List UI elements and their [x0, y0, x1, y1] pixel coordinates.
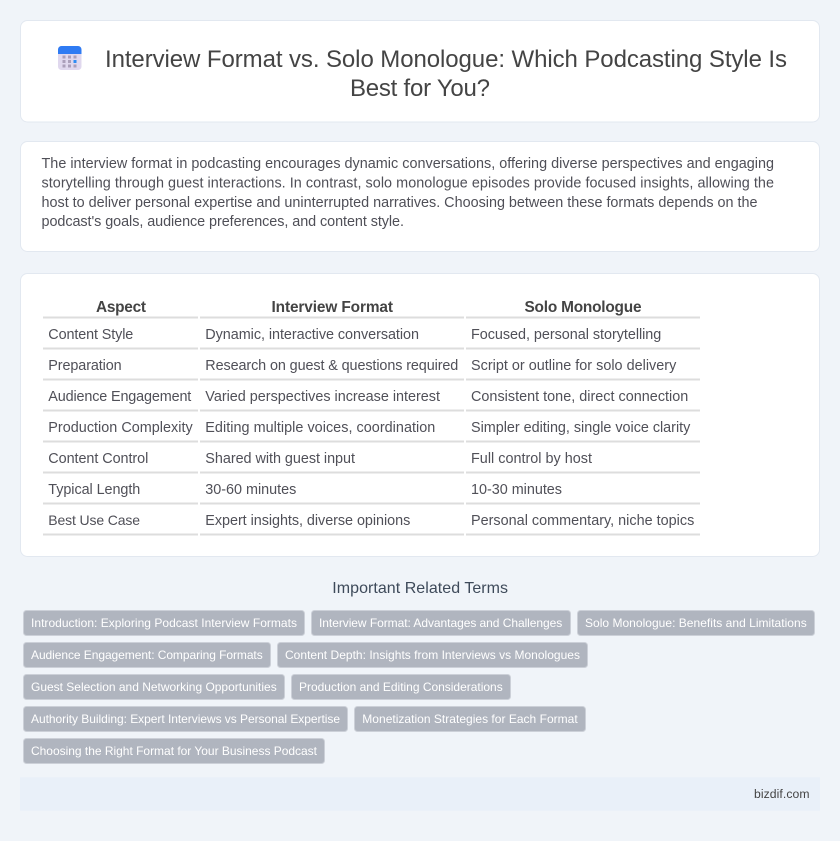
row: content control	[48, 451, 592, 467]
footer	[20, 777, 820, 811]
title: Interview Format vs. Solo Monologue: Which Podcasting Style Is	[105, 46, 787, 73]
tag: audience engagement: Audience Engagement: Comparing Formats	[31, 648, 263, 662]
row: typical length	[48, 482, 562, 498]
panel: comparison table	[20, 274, 820, 556]
tag: guest selection	[24, 674, 284, 700]
row: content control: Shared with guest input	[205, 451, 355, 467]
row: preparation: Research on guest & questions required	[205, 358, 458, 374]
table rules	[43, 316, 700, 536]
row: best use case	[48, 512, 694, 529]
row: content control: Content Control	[48, 451, 148, 467]
row: preparation: Script or outline for solo delivery	[471, 358, 677, 374]
row: production complexity: Simpler editing, single voice clarity	[471, 420, 691, 436]
panel: title header	[20, 20, 820, 122]
text block: introduction paragraph: The interview format in podcasting encourages dynamic conversations, offering diverse perspectives and engaging	[42, 156, 774, 172]
row: typical length: 30-60 minutes	[205, 482, 296, 498]
text block: introduction paragraph: podcast's goals, audience preferences, and content style.	[42, 214, 404, 230]
panel: introduction text	[20, 142, 820, 252]
footer site name: bizdif.com	[754, 787, 810, 801]
row: best use case: Personal commentary, niche topics	[471, 513, 694, 529]
tag: production and editing	[292, 674, 510, 700]
heading: important related terms: Important Related Terms	[332, 580, 508, 597]
row: audience engagement: Varied perspectives increase interest	[205, 389, 440, 405]
tag: content depth	[278, 642, 588, 668]
row: best use case: Best Use Case	[48, 512, 140, 528]
tag: content depth: Content Depth: Insights from Interviews vs Monologues	[285, 648, 580, 662]
row: audience engagement	[48, 389, 688, 405]
title: Best for You?	[350, 75, 490, 102]
row: best use case: Expert insights, diverse opinions	[205, 513, 410, 529]
tag: authority building: Authority Building: Expert Interviews vs Personal Expertise	[31, 712, 340, 726]
tag: production and editing: Production and Editing Considerations	[299, 680, 503, 694]
tag: interview format	[312, 610, 570, 636]
table header row: Aspect	[96, 299, 146, 316]
row: production complexity: Editing multiple voices, coordination	[205, 420, 435, 436]
row: content style: Dynamic, interactive conversation	[205, 327, 419, 343]
row: preparation: Preparation	[48, 358, 122, 374]
table header row: Solo Monologue	[524, 299, 642, 316]
row: audience engagement: Consistent tone, direct connection	[471, 389, 688, 405]
row: typical length: Typical Length	[48, 482, 140, 498]
row: typical length: 10-30 minutes	[471, 482, 562, 498]
icon: calendar	[58, 46, 82, 70]
tag: solo monologue	[578, 610, 814, 636]
text block: introduction paragraph: storytelling through guest interactions. In contrast, solo monologue episodes provide focused insights, allowing the	[42, 176, 774, 192]
tag: choosing the right format: Choosing the Right Format for Your Business Podcast	[31, 744, 318, 758]
text block: introduction paragraph: host to deliver personal expertise and uninterrupted narratives. Choosing between these formats depends on the	[42, 195, 758, 211]
row: production complexity: Production Complexity	[48, 420, 193, 436]
row: production complexity	[48, 420, 691, 436]
tag: interview format: Interview Format: Advantages and Challenges	[319, 616, 562, 630]
tag: monetization	[354, 706, 586, 732]
tag: introduction	[24, 610, 304, 636]
row: preparation	[48, 358, 677, 374]
table header row: Interview Format	[272, 299, 393, 316]
tag: guest selection: Guest Selection and Networking Opportunities	[31, 680, 277, 694]
tag: audience engagement	[24, 642, 270, 668]
row: content style	[48, 327, 661, 343]
tag: choosing the right format	[24, 738, 324, 764]
row: content style: Focused, personal storytelling	[471, 327, 661, 343]
row: content control: Full control by host	[471, 451, 592, 467]
tag: introduction: Introduction: Exploring Podcast Interview Formats	[31, 616, 297, 630]
tag: monetization: Monetization Strategies for Each Format	[362, 712, 578, 726]
panel: related term tags	[24, 610, 814, 764]
tag: solo monologue: Solo Monologue: Benefits and Limitations	[585, 616, 807, 630]
tag: authority building	[24, 706, 348, 732]
row: audience engagement: Audience Engagement	[48, 389, 191, 405]
row: content style: Content Style	[48, 327, 133, 343]
table header row	[96, 299, 642, 316]
